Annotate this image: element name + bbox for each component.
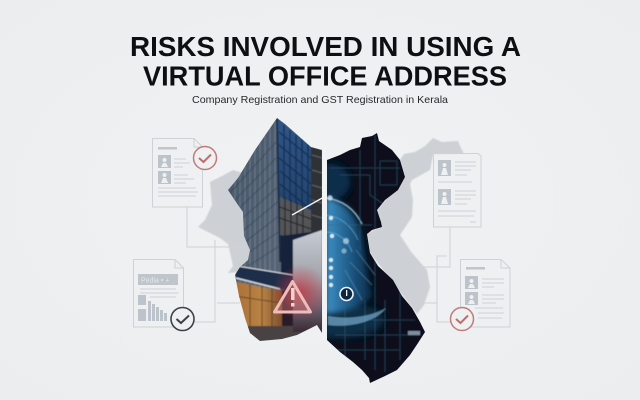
building photo clipped to map (228, 118, 322, 341)
icon: dark check badge bottom left (171, 308, 194, 330)
document: top right (434, 154, 481, 227)
document: bottom left: Pedia • + (141, 278, 169, 284)
grey map silhouette: right (367, 138, 464, 314)
icon: red check badge top left (194, 146, 216, 170)
grey map silhouette: left (198, 170, 262, 280)
document: bottom left (134, 260, 184, 327)
digital map photo clipped to map (327, 133, 425, 383)
subtitle: Company Registration and GST Registration in Kerala (192, 94, 448, 106)
title: RISKS INVOLVED IN USING A (130, 31, 521, 62)
icon: red check badge bottom right (450, 308, 474, 330)
connector lines (187, 207, 453, 322)
light ray (292, 197, 324, 215)
divider beam (324, 148, 326, 338)
document: top left (152, 138, 202, 207)
title: VIRTUAL OFFICE ADDRESS (143, 60, 507, 92)
icon: info circle (340, 288, 353, 300)
title (130, 31, 521, 92)
icon: warning triangle (274, 282, 310, 312)
document: bottom right (460, 260, 510, 327)
